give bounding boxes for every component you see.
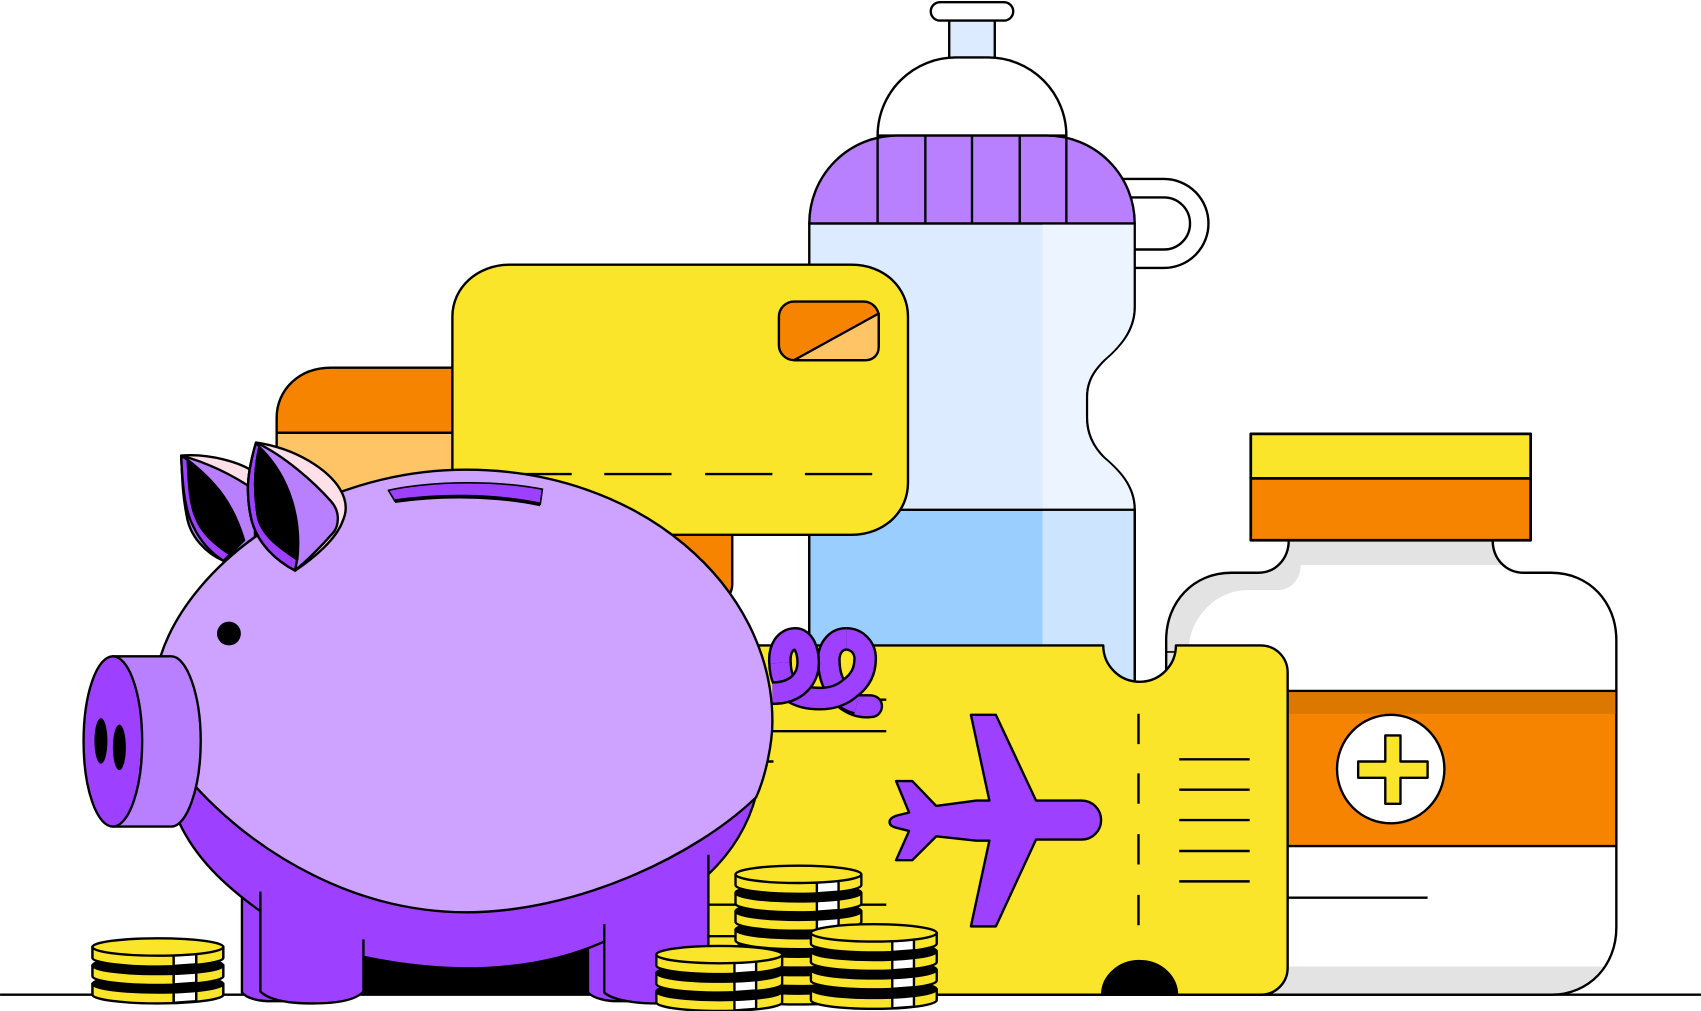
plane ticket [705, 645, 1288, 995]
jar body [1166, 540, 1616, 995]
coin stack far left [92, 938, 223, 1003]
bottle dome [878, 57, 1066, 136]
ticket text lines left [705, 700, 886, 936]
pig underbelly shadow [363, 933, 588, 995]
pig upper body [161, 470, 772, 912]
icon: medical cross [1337, 715, 1444, 823]
coin stack right [811, 924, 937, 1009]
jar shadow [1166, 540, 1501, 694]
bottle neck [949, 18, 995, 60]
pig tail [772, 639, 882, 717]
bottle handle [1117, 179, 1208, 268]
jar edge line [1166, 651, 1182, 653]
medicine jar [1166, 434, 1616, 995]
pig leg outlines [179, 795, 756, 1003]
piggy bank [84, 443, 882, 1003]
jar lid [1251, 434, 1531, 540]
icon: airplane [890, 715, 1101, 926]
water bottle [809, 2, 1208, 694]
ticket bottom notch [1102, 961, 1177, 995]
card number dashes [504, 473, 872, 475]
pig back ear [181, 455, 260, 561]
jar label band [1258, 691, 1616, 846]
bottle water [809, 510, 1135, 694]
pig eye [217, 622, 241, 645]
coin stack centre tall [736, 866, 861, 1004]
jar label line [1258, 897, 1428, 899]
pig nostrils [94, 718, 126, 770]
bottle cap [931, 2, 1013, 21]
pig lower body [179, 783, 756, 1003]
bottle body [809, 223, 1135, 694]
pig rear legs [242, 890, 640, 1001]
coin stack centre short [656, 946, 782, 1011]
yellow credit card [452, 265, 908, 535]
bottle ribbed lid [809, 136, 1135, 223]
ground line [0, 994, 1701, 996]
ticket text lines right [1179, 759, 1250, 881]
card chip [779, 302, 879, 360]
pig front ear [248, 443, 346, 571]
pig snout [84, 656, 201, 827]
ticket perforation [1137, 714, 1140, 925]
pig coin slot [388, 483, 542, 504]
orange card [277, 368, 732, 599]
